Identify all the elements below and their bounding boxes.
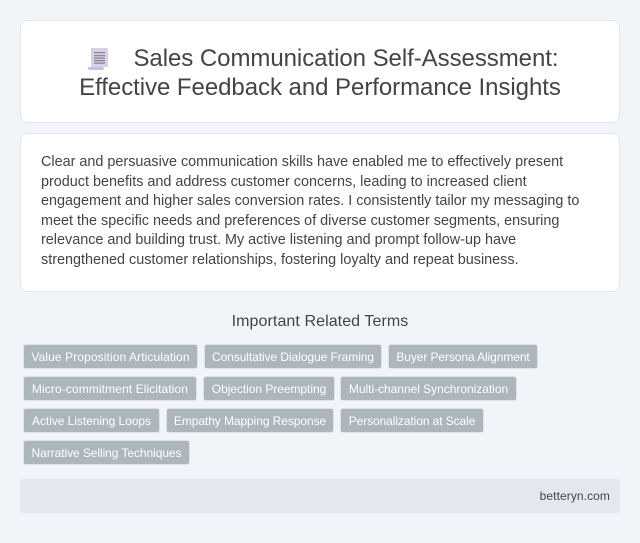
tag: Value Proposition Articulation: Value Proposition Articulation — [31, 350, 190, 364]
tag: Personalization at Scale: Personalization at Scale — [349, 414, 475, 428]
heading: related terms: Important Related Terms — [232, 313, 408, 330]
text block: self-assessment paragraph: product benefits and address customer concerns, leading to increased client — [41, 174, 527, 190]
tag: Narrative Selling Techniques — [23, 440, 190, 465]
title: Sales Communication Self-Assessment: — [133, 45, 559, 72]
tag: Active Listening Loops — [23, 408, 160, 433]
tag: Micro-commitment Elicitation — [23, 376, 197, 401]
panel: term tags — [23, 344, 538, 465]
tag: Objection Preempting — [203, 376, 335, 401]
tag: Micro-commitment Elicitation: Micro-commitment Elicitation — [32, 382, 188, 396]
tag: Consultative Dialogue Framing: Consultative Dialogue Framing — [212, 350, 374, 364]
icon: document scroll — [88, 48, 108, 70]
title — [79, 45, 561, 101]
title: Effective Feedback and Performance Insights — [79, 74, 561, 101]
tag: Multi-channel Synchronization: Multi-channel Synchronization — [349, 382, 508, 396]
tag: Empathy Mapping Response — [166, 408, 334, 433]
tag: Multi-channel Synchronization — [340, 376, 517, 401]
text block: self-assessment paragraph: meet the specific needs and preferences of diverse customer segments, ensuring — [41, 212, 559, 228]
tag: Empathy Mapping Response: Empathy Mapping Response — [174, 414, 326, 428]
text block: self-assessment paragraph: relevance and building trust. My active listening and prompt follow-up have — [41, 232, 516, 248]
text block: self-assessment paragraph: engagement and higher sales conversion rates. I consistently tailor my messaging to — [41, 193, 579, 209]
tag: Narrative Selling Techniques: Narrative Selling Techniques — [32, 446, 181, 460]
text block: self-assessment paragraph — [41, 154, 579, 268]
tag: Consultative Dialogue Framing — [204, 344, 382, 369]
tag: Buyer Persona Alignment — [388, 344, 538, 369]
tag: Value Proposition Articulation — [23, 344, 198, 369]
tag: Buyer Persona Alignment: Buyer Persona Alignment — [396, 350, 530, 364]
tag: Active Listening Loops: Active Listening Loops — [32, 414, 151, 428]
footer source text: betteryn.com — [540, 489, 610, 503]
panel: title card — [20, 20, 620, 123]
footer bar — [20, 479, 620, 513]
panel: description card — [20, 133, 620, 292]
text block: self-assessment paragraph: strengthened customer relationships, fostering loyalty and repeat business. — [41, 252, 519, 268]
tag: Personalization at Scale — [340, 408, 484, 433]
text block: self-assessment paragraph: Clear and persuasive communication skills have enabled me to effectively present — [41, 154, 563, 170]
tag: Objection Preempting: Objection Preempting — [212, 382, 326, 396]
